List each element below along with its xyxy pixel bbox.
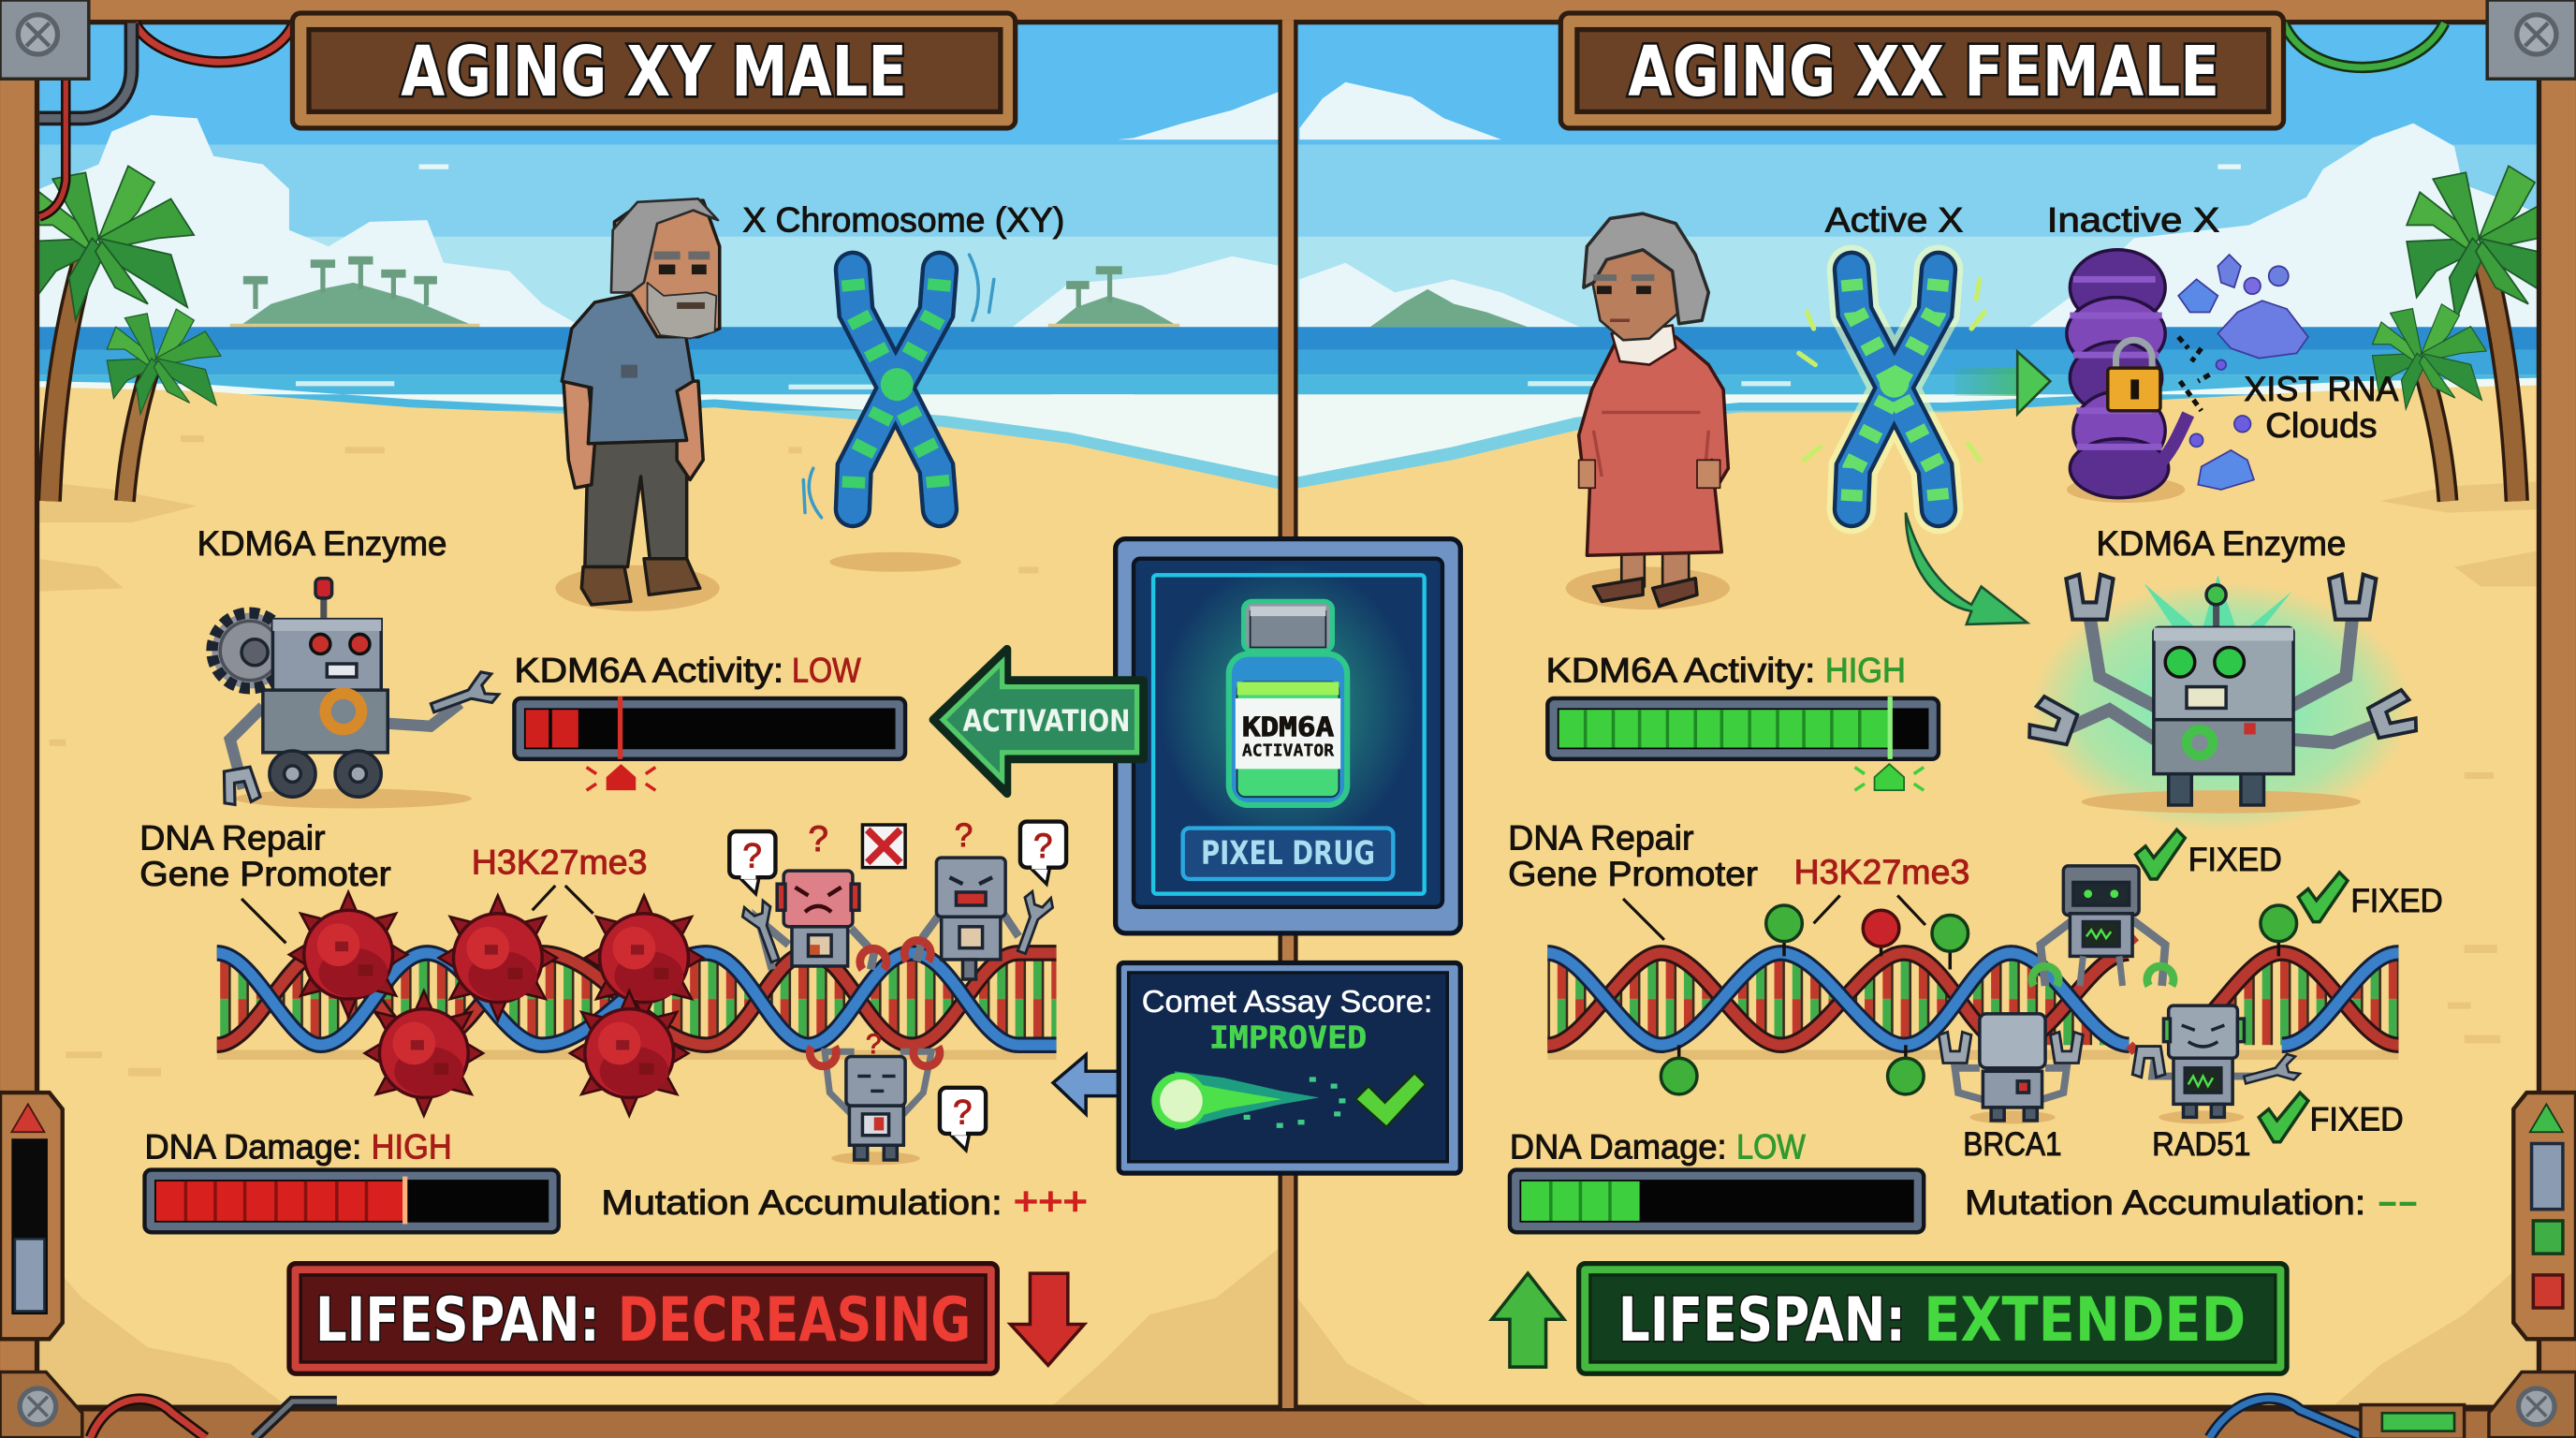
activation arrow: ACTIVATION [963, 705, 1131, 739]
confused robot: grey face [904, 858, 1056, 979]
label: BRCA1: BRCA1 [1963, 1126, 2062, 1163]
side control panel: right [2513, 1093, 2576, 1339]
label: active X: Active X [1825, 200, 1963, 239]
right DNA helix [1547, 936, 2398, 1060]
activity label: female high [1546, 651, 1906, 689]
bottle: KDM6A activator: ACTIVATOR [1242, 741, 1335, 760]
bottle: KDM6A activator: KDM6A [1242, 712, 1334, 742]
badge: pixel drug [1183, 829, 1393, 879]
label: XIST RNA clouds [2244, 370, 2399, 445]
label: XIST RNA clouds: XIST RNA [2244, 370, 2399, 408]
fixed tag: top robot [2136, 829, 2282, 879]
corner plate: top left [0, 0, 89, 79]
label: DNA repair gene promoter left: DNA Repair [139, 818, 326, 857]
DNA damage bar: female [1510, 1170, 1924, 1232]
arrow: lifespan down [1010, 1273, 1084, 1365]
label: KDM6A enzyme left: KDM6A Enzyme [198, 524, 446, 563]
activity bar: male low [514, 697, 905, 790]
label: KDM6A enzyme right: KDM6A Enzyme [2096, 524, 2346, 563]
mutation accumulation: female: -- [2378, 1179, 2418, 1223]
lifespan banner: extended: LIFESPAN: [1618, 1285, 1906, 1356]
mutation accumulation: female [1965, 1179, 2418, 1223]
aged man figure [555, 198, 720, 611]
panel: comet assay: Comet Assay Score: [1142, 985, 1432, 1020]
question mark bubbles: ? [953, 1093, 972, 1131]
robot: weak KDM6A enzyme [212, 579, 501, 808]
DNA damage label: male: HIGH [372, 1127, 452, 1166]
label: XIST RNA clouds: Clouds [2265, 406, 2378, 445]
lifespan banner: extended: EXTENDED [1924, 1285, 2246, 1356]
question mark bubbles: ? [1033, 827, 1052, 865]
label: H3K27me3 left [472, 844, 648, 914]
XIST RNA clouds [2178, 255, 2308, 490]
mutation accumulation: male [601, 1179, 1088, 1223]
lifespan banner: decreasing [289, 1264, 997, 1373]
label: DNA repair gene promoter right: Gene Promoter [1508, 855, 1758, 893]
corner plate: bottom right [2489, 1372, 2576, 1438]
lifespan banner: decreasing: DECREASING [618, 1285, 971, 1356]
fixed tag: top robot: FIXED [2188, 842, 2282, 878]
confused robot: bottom [810, 1047, 940, 1165]
fixed tag: helix [2298, 873, 2443, 922]
inactive X: coiled chromosome with lock [2067, 250, 2188, 503]
label: DNA repair gene promoter right: DNA Repair [1508, 818, 1693, 857]
DNA damage label: female: DNA Damage: [1510, 1127, 1727, 1166]
lifespan banner: decreasing: LIFESPAN: [315, 1285, 600, 1356]
DNA damage label: female: LOW [1736, 1127, 1806, 1166]
left DNA helix [217, 953, 1057, 1055]
DNA damage label: male: DNA Damage: [145, 1127, 361, 1166]
label: H3K27me3 right: H3K27me3 [1794, 853, 1969, 891]
mutation accumulation: male: Mutation Accumulation: [601, 1183, 1003, 1222]
chromosome: X (XY) [803, 255, 994, 518]
label: inactive X: Inactive X [2047, 200, 2219, 239]
label: RAD51: RAD51 [2152, 1126, 2250, 1163]
fixed tag: helix: FIXED [2351, 883, 2443, 919]
question mark bubbles: ? [955, 817, 973, 854]
activity label: male low: KDM6A Activity: [514, 651, 783, 689]
label: H3K27me3 left: H3K27me3 [472, 844, 648, 882]
corner plate: bottom left [0, 1372, 82, 1438]
panel: pixel drug [1116, 539, 1460, 933]
curved arrow: active X to enzyme [1906, 513, 2027, 624]
right palm trees [2372, 166, 2574, 501]
mutation accumulation: female: Mutation Accumulation: [1965, 1183, 2365, 1222]
repair robot: BRCA1 [1939, 1014, 2083, 1123]
shadow under chromosome [829, 552, 961, 572]
label: DNA repair gene promoter left: Gene Promoter [139, 855, 391, 893]
chromosome: active X [1799, 270, 1984, 509]
badge: pixel drug: PIXEL DRUG [1201, 834, 1375, 873]
wood posts between center panels [1278, 933, 1298, 962]
confused robot: red face [739, 871, 886, 969]
title sign: aging XX female [1560, 13, 2284, 128]
repair robot: RAD51 [2132, 1005, 2301, 1123]
title sign: aging XY male [292, 13, 1016, 128]
question mark bubbles: ? [742, 837, 762, 875]
DNA damage bar: male [145, 1170, 559, 1232]
activity label: male low: LOW [792, 651, 861, 689]
panel: comet assay [1053, 962, 1460, 1173]
question mark bubbles: ? [809, 819, 828, 859]
activity label: female high: HIGH [1825, 651, 1906, 689]
label: H3K27me3 right [1794, 853, 1969, 925]
status indicator: bottom right [2361, 1405, 2465, 1438]
activation arrow [933, 649, 1144, 794]
question mark bubbles: ? [866, 1029, 882, 1060]
left palm trees [26, 166, 221, 501]
bottle: KDM6A activator [1229, 601, 1347, 805]
H3K27me3 marks: spiked balls [289, 892, 703, 1116]
corner plate: top right [2487, 0, 2576, 79]
arrow: lifespan up [1492, 1273, 1564, 1367]
mutation accumulation: male: +++ [1014, 1179, 1088, 1223]
arrow: active to inactive [1955, 352, 2050, 414]
comet icon [1151, 1071, 1345, 1130]
fixed tag: RAD51: FIXED [2310, 1101, 2404, 1137]
label: DNA repair gene promoter left [139, 818, 391, 943]
methyl marks: green and red dots [1661, 905, 2297, 1094]
lifespan banner: extended [1579, 1264, 2287, 1373]
aged woman figure [1566, 213, 1730, 609]
repair robot: top [2032, 866, 2174, 986]
question mark bubbles [729, 817, 1066, 1151]
side control panel: left [0, 1093, 63, 1339]
label: X chromosome: X Chromosome (XY) [742, 200, 1064, 239]
label: DNA repair gene promoter right [1508, 818, 1758, 940]
robot: active KDM6A enzyme [2026, 575, 2420, 831]
activity bar: female high [1547, 697, 1939, 790]
title sign: aging XX female: AGING XX FEMALE [1628, 33, 2219, 112]
panel: comet assay: IMPROVED [1209, 1020, 1367, 1056]
title sign: aging XY male: AGING XY MALE [401, 33, 907, 112]
check mark [1355, 1073, 1426, 1127]
activity label: female high: KDM6A Activity: [1546, 651, 1815, 689]
fixed tag: RAD51 [2259, 1093, 2404, 1142]
